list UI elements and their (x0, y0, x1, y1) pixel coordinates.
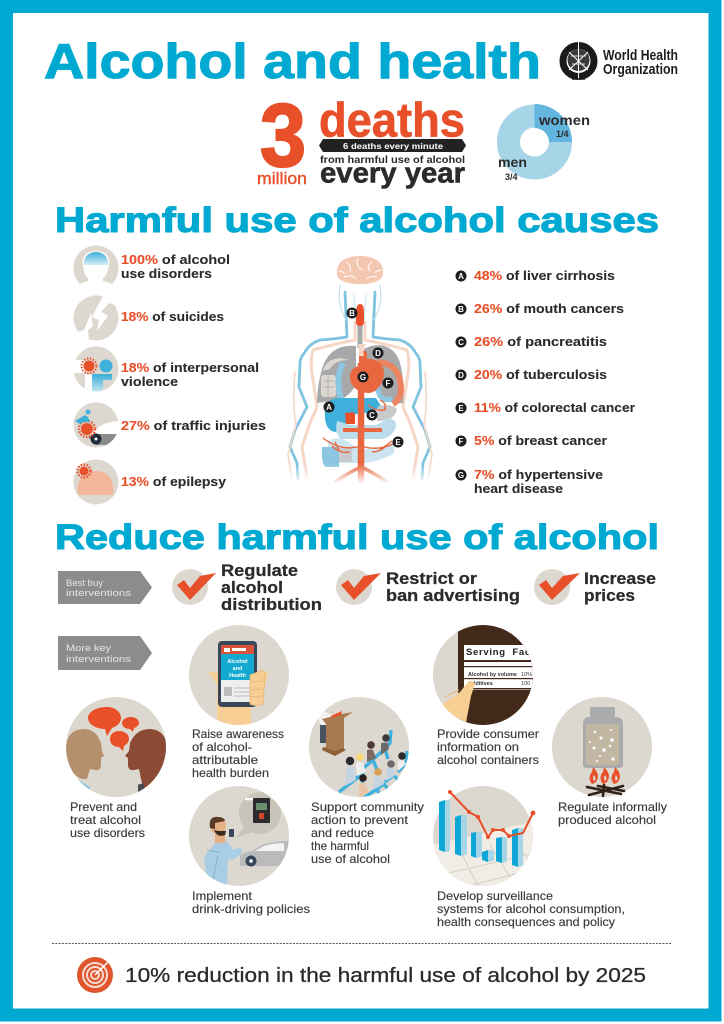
item F: 5% of breast cancer (474, 433, 607, 448)
panel: conditions list left (71, 246, 266, 504)
item: interpersonal violence: violence (121, 374, 178, 389)
label men: men (498, 155, 527, 170)
intervention: consumer information: information on (437, 741, 519, 754)
donut chart: men and women: 3/4 (505, 172, 518, 182)
intervention: support community: action to prevent (311, 814, 409, 827)
text: Support community (311, 801, 424, 814)
intervention: raise awareness: of alcohol- (192, 741, 252, 754)
intervention: support community: use of alcohol (311, 853, 390, 866)
body vessels (288, 285, 432, 480)
intervention: prevent and treat: treat alcohol (70, 814, 141, 827)
badge D (372, 348, 384, 358)
intervention: drink-driving (189, 786, 310, 916)
intervention: prevent and treat: use disorders (70, 827, 145, 840)
icon: serving facts label: Alcohol by volume (468, 672, 517, 678)
text: 27% of traffic injuries (121, 418, 266, 433)
item G: heart disease (474, 481, 563, 496)
tag: best buy interventions (58, 571, 152, 604)
tag: best buy interventions: interventions (66, 588, 131, 599)
icon: head (74, 246, 118, 290)
tag: best buy interventions: Best buy (66, 578, 103, 589)
goal text: 10% reduction in the harmful use of alcohol by 2025 (125, 965, 646, 987)
icon: traffic (74, 402, 120, 448)
icon: breathalyser and car (189, 786, 290, 886)
item: alcohol use disorders: use disorders (121, 266, 212, 281)
best buy: restrict advertising (336, 569, 520, 605)
item: suicides (72, 294, 224, 342)
text: Restrict or (386, 569, 478, 588)
icon: serving facts label: Additives (468, 681, 493, 687)
item G: G (458, 471, 464, 480)
title: Alcohol and health (44, 35, 541, 89)
badge F: F (386, 379, 391, 388)
WHO logo: Organization (603, 61, 678, 78)
icon: WHO emblem (563, 41, 594, 80)
intervention: support community: and reduce (311, 827, 374, 840)
best buy: regulate distribution: alcohol (221, 578, 283, 597)
icon: check (172, 569, 216, 605)
text: Regulate informally (558, 801, 667, 814)
icon: phone in hand: Alcohol (227, 659, 248, 665)
icon: check (336, 569, 381, 605)
icon: hands (74, 296, 118, 340)
text: Prevent and (70, 801, 137, 814)
item: alcohol use disorders (71, 246, 230, 293)
badge F (382, 378, 394, 388)
tag: more key interventions: interventions (66, 654, 131, 665)
item C: C (458, 338, 464, 347)
intervention: drink-driving: drink-driving policies (192, 903, 310, 916)
panel: conditions list right (456, 268, 635, 496)
item B: B (458, 305, 464, 314)
icon: two heads talking (66, 697, 167, 801)
item: interpersonal violence (72, 346, 259, 394)
item: epilepsy (74, 460, 227, 504)
text: 13% of epilepsy (121, 474, 227, 489)
text: 18% of suicides (121, 309, 224, 324)
item C: 26% of pancreatitis (474, 334, 607, 349)
black banner (319, 139, 466, 152)
text: Implement (192, 890, 253, 903)
text: Develop surveillance (437, 890, 553, 903)
badge C (366, 410, 378, 420)
best buy: regulate distribution: distribution (221, 595, 322, 614)
intervention: surveillance (420, 786, 625, 929)
icon: jar on fire (552, 697, 652, 797)
donut (508, 104, 572, 168)
badge E: E (395, 438, 401, 447)
from harmful use: from harmful use of alcohol (320, 154, 465, 166)
tag: more key interventions (58, 636, 152, 670)
seated people (345, 734, 406, 798)
icon: brain (74, 460, 118, 504)
tag: more key interventions: More key (66, 643, 111, 654)
intestines (322, 418, 396, 467)
intervention: informally produced alcohol: produced alcohol (558, 814, 656, 827)
every year: every year (320, 158, 465, 190)
icon: violence (72, 346, 118, 394)
badge G (358, 372, 368, 382)
text: Raise awareness (192, 728, 284, 741)
intervention: raise awareness: attributable (192, 754, 258, 767)
intervention: prevent and treat (66, 697, 167, 840)
item B: 26% of mouth cancers (474, 301, 624, 316)
intervention: consumer information: alcohol containers (437, 754, 539, 767)
icon: phone in hand: and (233, 666, 242, 672)
intervention: surveillance: systems for alcohol consumption, (437, 903, 625, 916)
best buy: regulate distribution (172, 561, 322, 614)
heart and aorta (323, 344, 397, 484)
item A: A (458, 272, 464, 281)
item D: D (458, 371, 464, 380)
donut chart: men and women (498, 104, 590, 182)
item D: 20% of tuberculosis (474, 367, 607, 382)
item: traffic injuries (74, 402, 266, 448)
logo text: World Health (603, 47, 678, 64)
pancreas (345, 412, 355, 424)
icon: check (534, 569, 580, 605)
million: million (257, 169, 307, 188)
best buy: increase prices (534, 569, 656, 605)
text: Provide consumer (437, 728, 539, 741)
intervention: support community (309, 697, 424, 866)
badge B: B (349, 309, 355, 318)
WHO logo (563, 41, 678, 80)
goal (77, 957, 646, 993)
big number 3: 3 (260, 85, 306, 185)
icon: target (77, 957, 113, 993)
badge A (324, 402, 334, 412)
item G: 7% of hypertensive (474, 467, 603, 482)
intervention: consumer information (433, 620, 539, 767)
black banner: 6 deaths every minute (343, 141, 443, 151)
icon: phone in hand (189, 625, 289, 725)
badge C: C (369, 411, 375, 420)
text: 100% of alcohol (121, 252, 230, 267)
icon: serving facts label: 10% (521, 672, 532, 678)
best buy: restrict advertising: ban advertising (386, 586, 520, 605)
intervention: raise awareness (189, 625, 289, 780)
trachea and throat (356, 304, 364, 348)
text: Increase (584, 569, 656, 588)
intervention: informally produced alcohol (552, 697, 667, 827)
deaths: deaths (319, 94, 465, 148)
donut chart: men and women: 1/4 (556, 129, 569, 139)
icon: bar chart (433, 786, 536, 886)
badge D: D (375, 349, 381, 358)
icon: serving facts label (433, 625, 533, 725)
chairs (339, 730, 407, 802)
badge A: A (326, 403, 332, 412)
icon: lecture audience (309, 697, 409, 802)
heading: causes: Harmful use of alcohol causes (55, 201, 659, 240)
brain (337, 256, 383, 284)
icon: serving facts label: 100 (521, 681, 530, 687)
text: 18% of interpersonal (121, 360, 259, 375)
badge G: G (360, 373, 366, 382)
item G (456, 467, 603, 496)
item E: E (458, 404, 464, 413)
intervention: raise awareness: health burden (192, 767, 269, 780)
liver and stomach (325, 398, 397, 432)
item A: 48% of liver cirrhosis (474, 268, 615, 283)
best buy: increase prices: prices (584, 586, 635, 605)
text: Regulate (221, 561, 298, 580)
intervention: surveillance: health consequences and policy (437, 916, 615, 929)
intervention: support community: the harmful (311, 840, 369, 853)
diagram: human body with organs (285, 256, 435, 484)
badge E (392, 436, 404, 448)
stat: 3 million deaths (257, 85, 466, 190)
label women: women (538, 113, 590, 128)
flames (590, 767, 620, 784)
heading: reduce: Reduce harmful use of alcohol (55, 518, 659, 557)
item F: F (459, 437, 464, 446)
sticks (587, 785, 624, 796)
lungs (317, 345, 404, 404)
icon: serving facts label: Serving Fac (466, 647, 531, 658)
badge B (346, 308, 358, 318)
item E: 11% of colorectal cancer (474, 400, 635, 415)
icon: phone in hand: Health (229, 673, 247, 679)
